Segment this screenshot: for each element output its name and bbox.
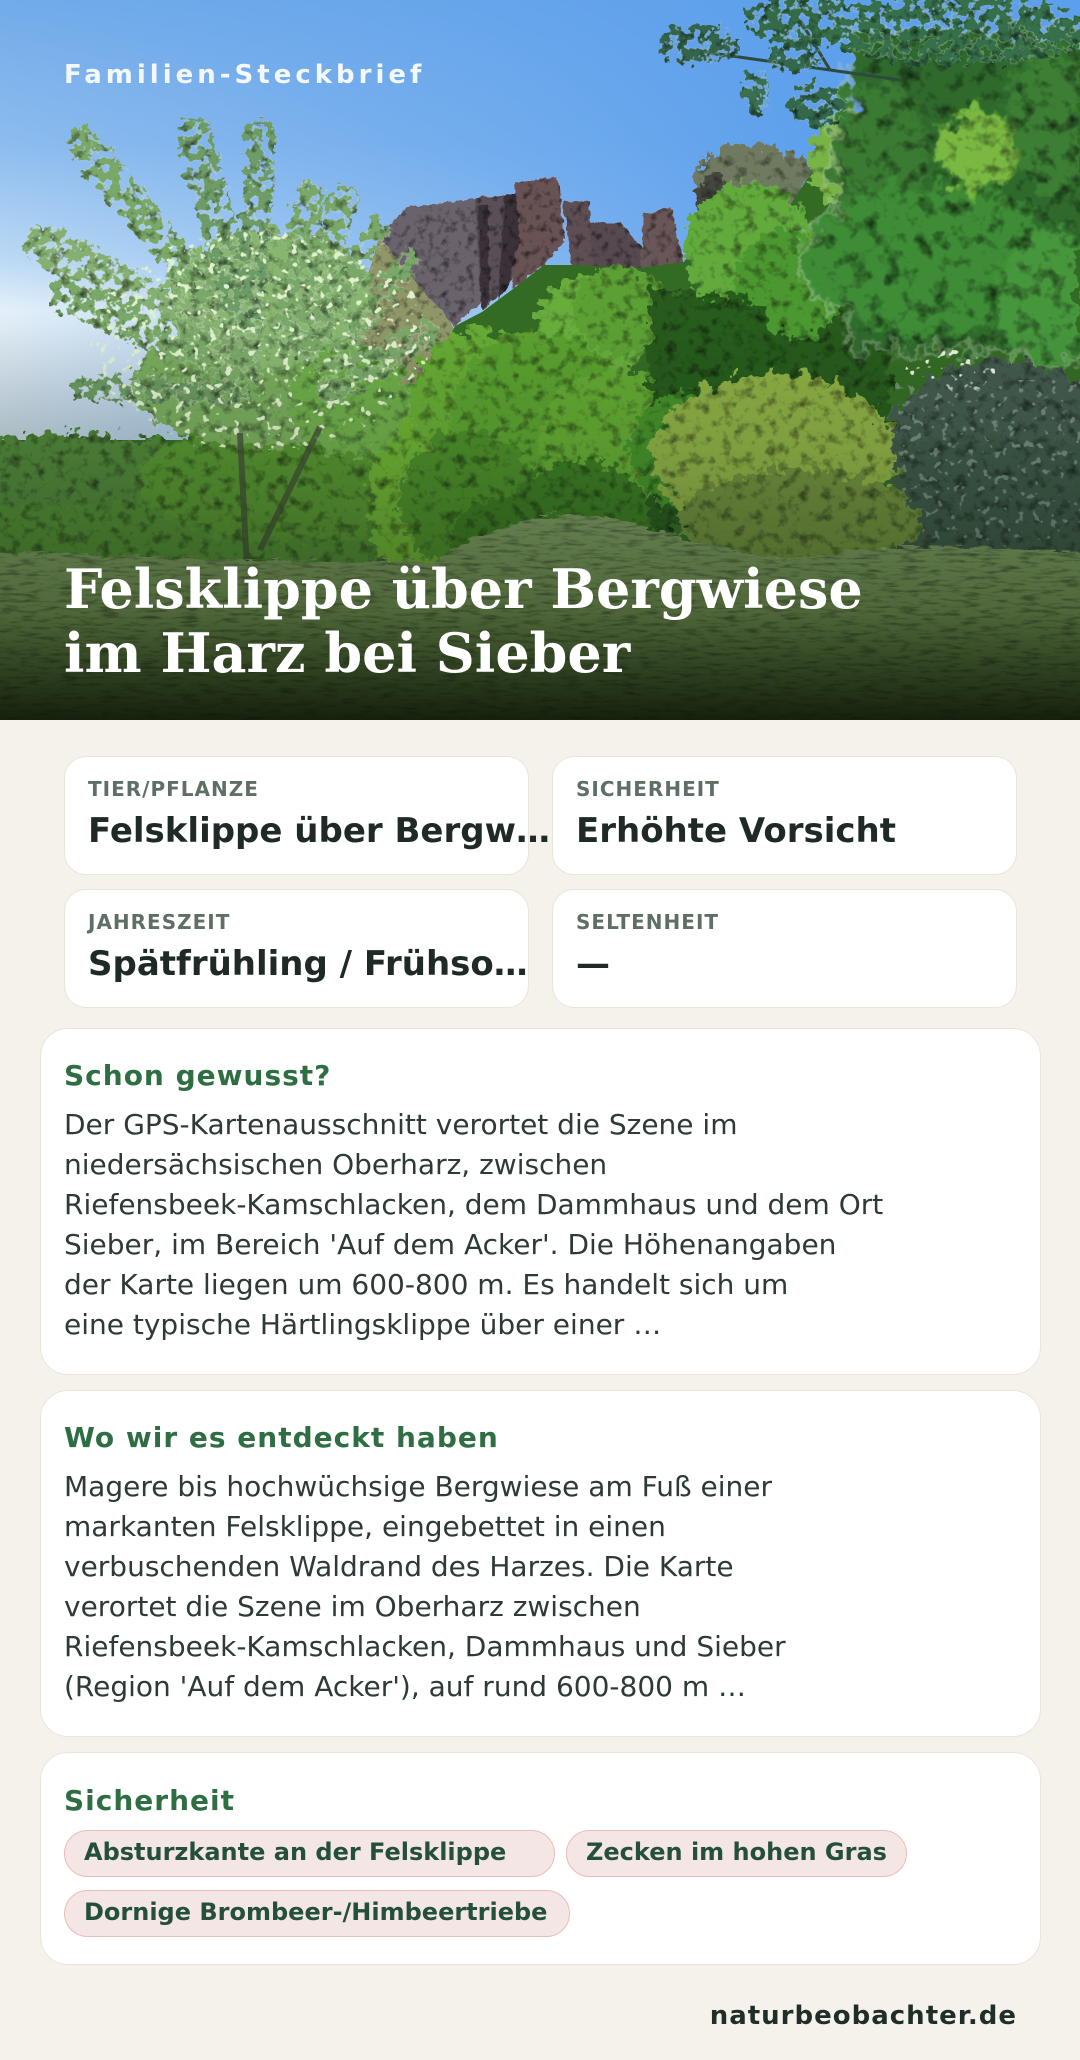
- heading: Sicherheit: [64, 1784, 235, 1817]
- panel: Wo wir es entdeckt haben: [40, 1390, 1041, 1737]
- title: Felsklippe über Bergwiese: [64, 557, 863, 621]
- olive bush: [653, 373, 920, 570]
- base of foliage behind the trees: [0, 60, 1080, 600]
- illustration: rock cliff above mountain meadow: [0, 0, 1080, 720]
- leaf clusters: [658, 0, 1080, 127]
- hillside under rock: [340, 237, 460, 430]
- stat card: Seltenheit: [552, 889, 1017, 1008]
- branch: [690, 20, 900, 80]
- dark gradient overlay: [0, 0, 1080, 720]
- pale leaf highlights: [90, 230, 430, 450]
- stat card: Sicherheit: [552, 756, 1017, 875]
- text block: Magere bis hochwüchsige Bergwiese am Fuß einer: [64, 1470, 772, 1503]
- trunk: [240, 427, 320, 570]
- text block: [64, 1108, 883, 1341]
- eyebrow: Familien-Steckbrief: [64, 60, 425, 90]
- text block: [64, 1470, 786, 1703]
- young tree on the left: [45, 135, 430, 570]
- text block: Sieber, im Bereich 'Auf dem Acker'. Die Höhenangaben: [64, 1228, 836, 1261]
- stat card: Tier/Pflanze: [64, 756, 529, 875]
- rock formation: [379, 177, 684, 326]
- overhanging branch leaves: [658, 0, 1080, 127]
- panel: Sicherheit: [40, 1752, 1041, 1965]
- middle trees: [400, 265, 687, 620]
- chip: Dornige Triebe: [64, 1890, 570, 1937]
- text block: Riefensbeek-Kamschlacken, dem Dammhaus und dem Ort: [64, 1188, 883, 1221]
- text block: eine typische Härtlingsklippe über einer …: [64, 1308, 661, 1341]
- ivy-covered rock on the right: [693, 144, 810, 235]
- sky: [0, 0, 1080, 720]
- brand footer: naturbeobachter.de: [710, 2001, 1017, 2031]
- label: SELTENHEIT: [576, 910, 719, 934]
- text block: (Region 'Auf dem Acker'), auf rund 600-800 m …: [64, 1670, 746, 1703]
- label: JAHRESZEIT: [88, 910, 230, 934]
- chip: Zecken: [566, 1830, 907, 1877]
- text block: verbuschenden Waldrand des Harzes. Die Karte: [64, 1550, 734, 1583]
- upper right canopy: [800, 30, 1080, 370]
- chip: Zecken: Zecken im hohen Gras: [586, 1838, 887, 1866]
- text block: Der GPS-Kartenausschnitt verortet die Szene im: [64, 1108, 737, 1141]
- chip: Absturzkante: Absturzkante an der Felsklippe: [84, 1838, 506, 1866]
- hedge on the left: [0, 370, 510, 630]
- hero panel with photo: [0, 0, 1080, 720]
- dark flowering bush: [890, 360, 1080, 560]
- text block: markanten Felsklippe, eingebettet in einen: [64, 1510, 666, 1543]
- fan branches: [45, 135, 425, 395]
- text block: niedersächsischen Oberharz, zwischen: [64, 1148, 607, 1181]
- value: —: [576, 944, 610, 984]
- value: Felsklippe über Bergw…: [88, 811, 550, 851]
- text block: Riefensbeek-Kamschlacken, Dammhaus und Sieber: [64, 1630, 786, 1663]
- value: Erhöhte Vorsicht: [576, 811, 896, 851]
- right tree group: [630, 112, 903, 530]
- panel: Schon gewusst: [40, 1028, 1041, 1375]
- value: Spätfrühling / Frühso…: [88, 944, 528, 984]
- heading: Schon gewusst?: [64, 1059, 331, 1092]
- label: SICHERHEIT: [576, 777, 720, 801]
- lower crown: [130, 230, 410, 455]
- text block: verortet die Szene im Oberharz zwischen: [64, 1590, 641, 1623]
- chip: Dornige Triebe: Dornige Brombeer-/Himbeertriebe: [84, 1898, 547, 1926]
- meadow: [0, 515, 1080, 740]
- title: im Harz bei Sieber: [64, 621, 630, 685]
- heading: Wo wir es entdeckt haben: [64, 1421, 499, 1454]
- stat card: Jahreszeit: [64, 889, 529, 1008]
- white flowers: [895, 350, 1080, 540]
- chip: Absturzkante: [64, 1830, 555, 1877]
- text block: der Karte liegen um 600-800 m. Es handelt sich um: [64, 1268, 788, 1301]
- label: TIER/PFLANZE: [88, 777, 259, 801]
- title: [64, 557, 863, 685]
